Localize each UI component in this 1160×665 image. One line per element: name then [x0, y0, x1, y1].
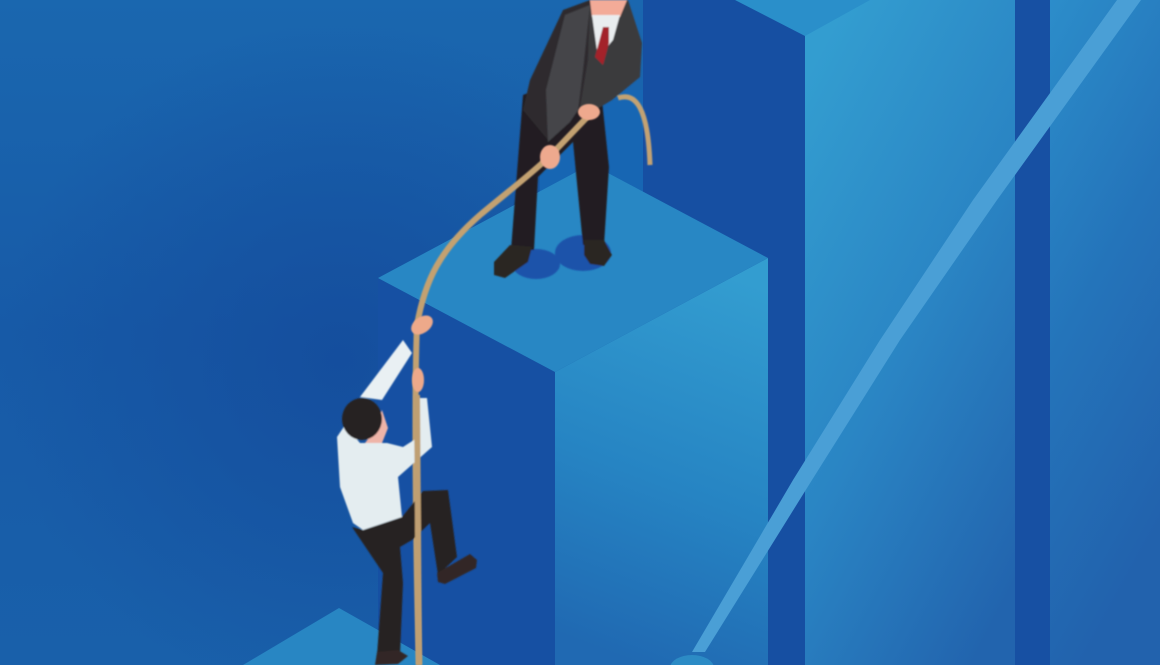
column 3	[643, 0, 1015, 665]
rope tail	[618, 97, 650, 165]
column 2	[378, 164, 768, 665]
shirt	[592, 15, 620, 58]
trousers	[511, 80, 609, 250]
foot shadows	[512, 235, 611, 279]
neck	[365, 410, 388, 443]
jacket right	[580, 0, 642, 112]
rope over climber	[417, 395, 419, 665]
shirt body	[337, 398, 432, 530]
shoes	[375, 554, 477, 665]
trend line	[692, 0, 1141, 652]
column 1	[243, 608, 440, 665]
neck	[590, 0, 627, 17]
standing businessman	[494, 0, 650, 279]
tie	[595, 27, 609, 65]
hands	[408, 312, 436, 392]
shirt arm	[360, 340, 412, 400]
background patch behind the standing man	[540, 90, 645, 200]
trend line base dot	[670, 655, 714, 665]
climbing man	[337, 312, 477, 665]
trousers	[352, 490, 457, 655]
shoes	[494, 240, 612, 278]
column 4	[1015, 0, 1160, 665]
rope	[416, 112, 592, 665]
head	[342, 398, 382, 440]
jacket dark back	[523, 0, 590, 140]
standing man hands	[540, 104, 600, 169]
jacket sleeve	[546, 5, 590, 142]
